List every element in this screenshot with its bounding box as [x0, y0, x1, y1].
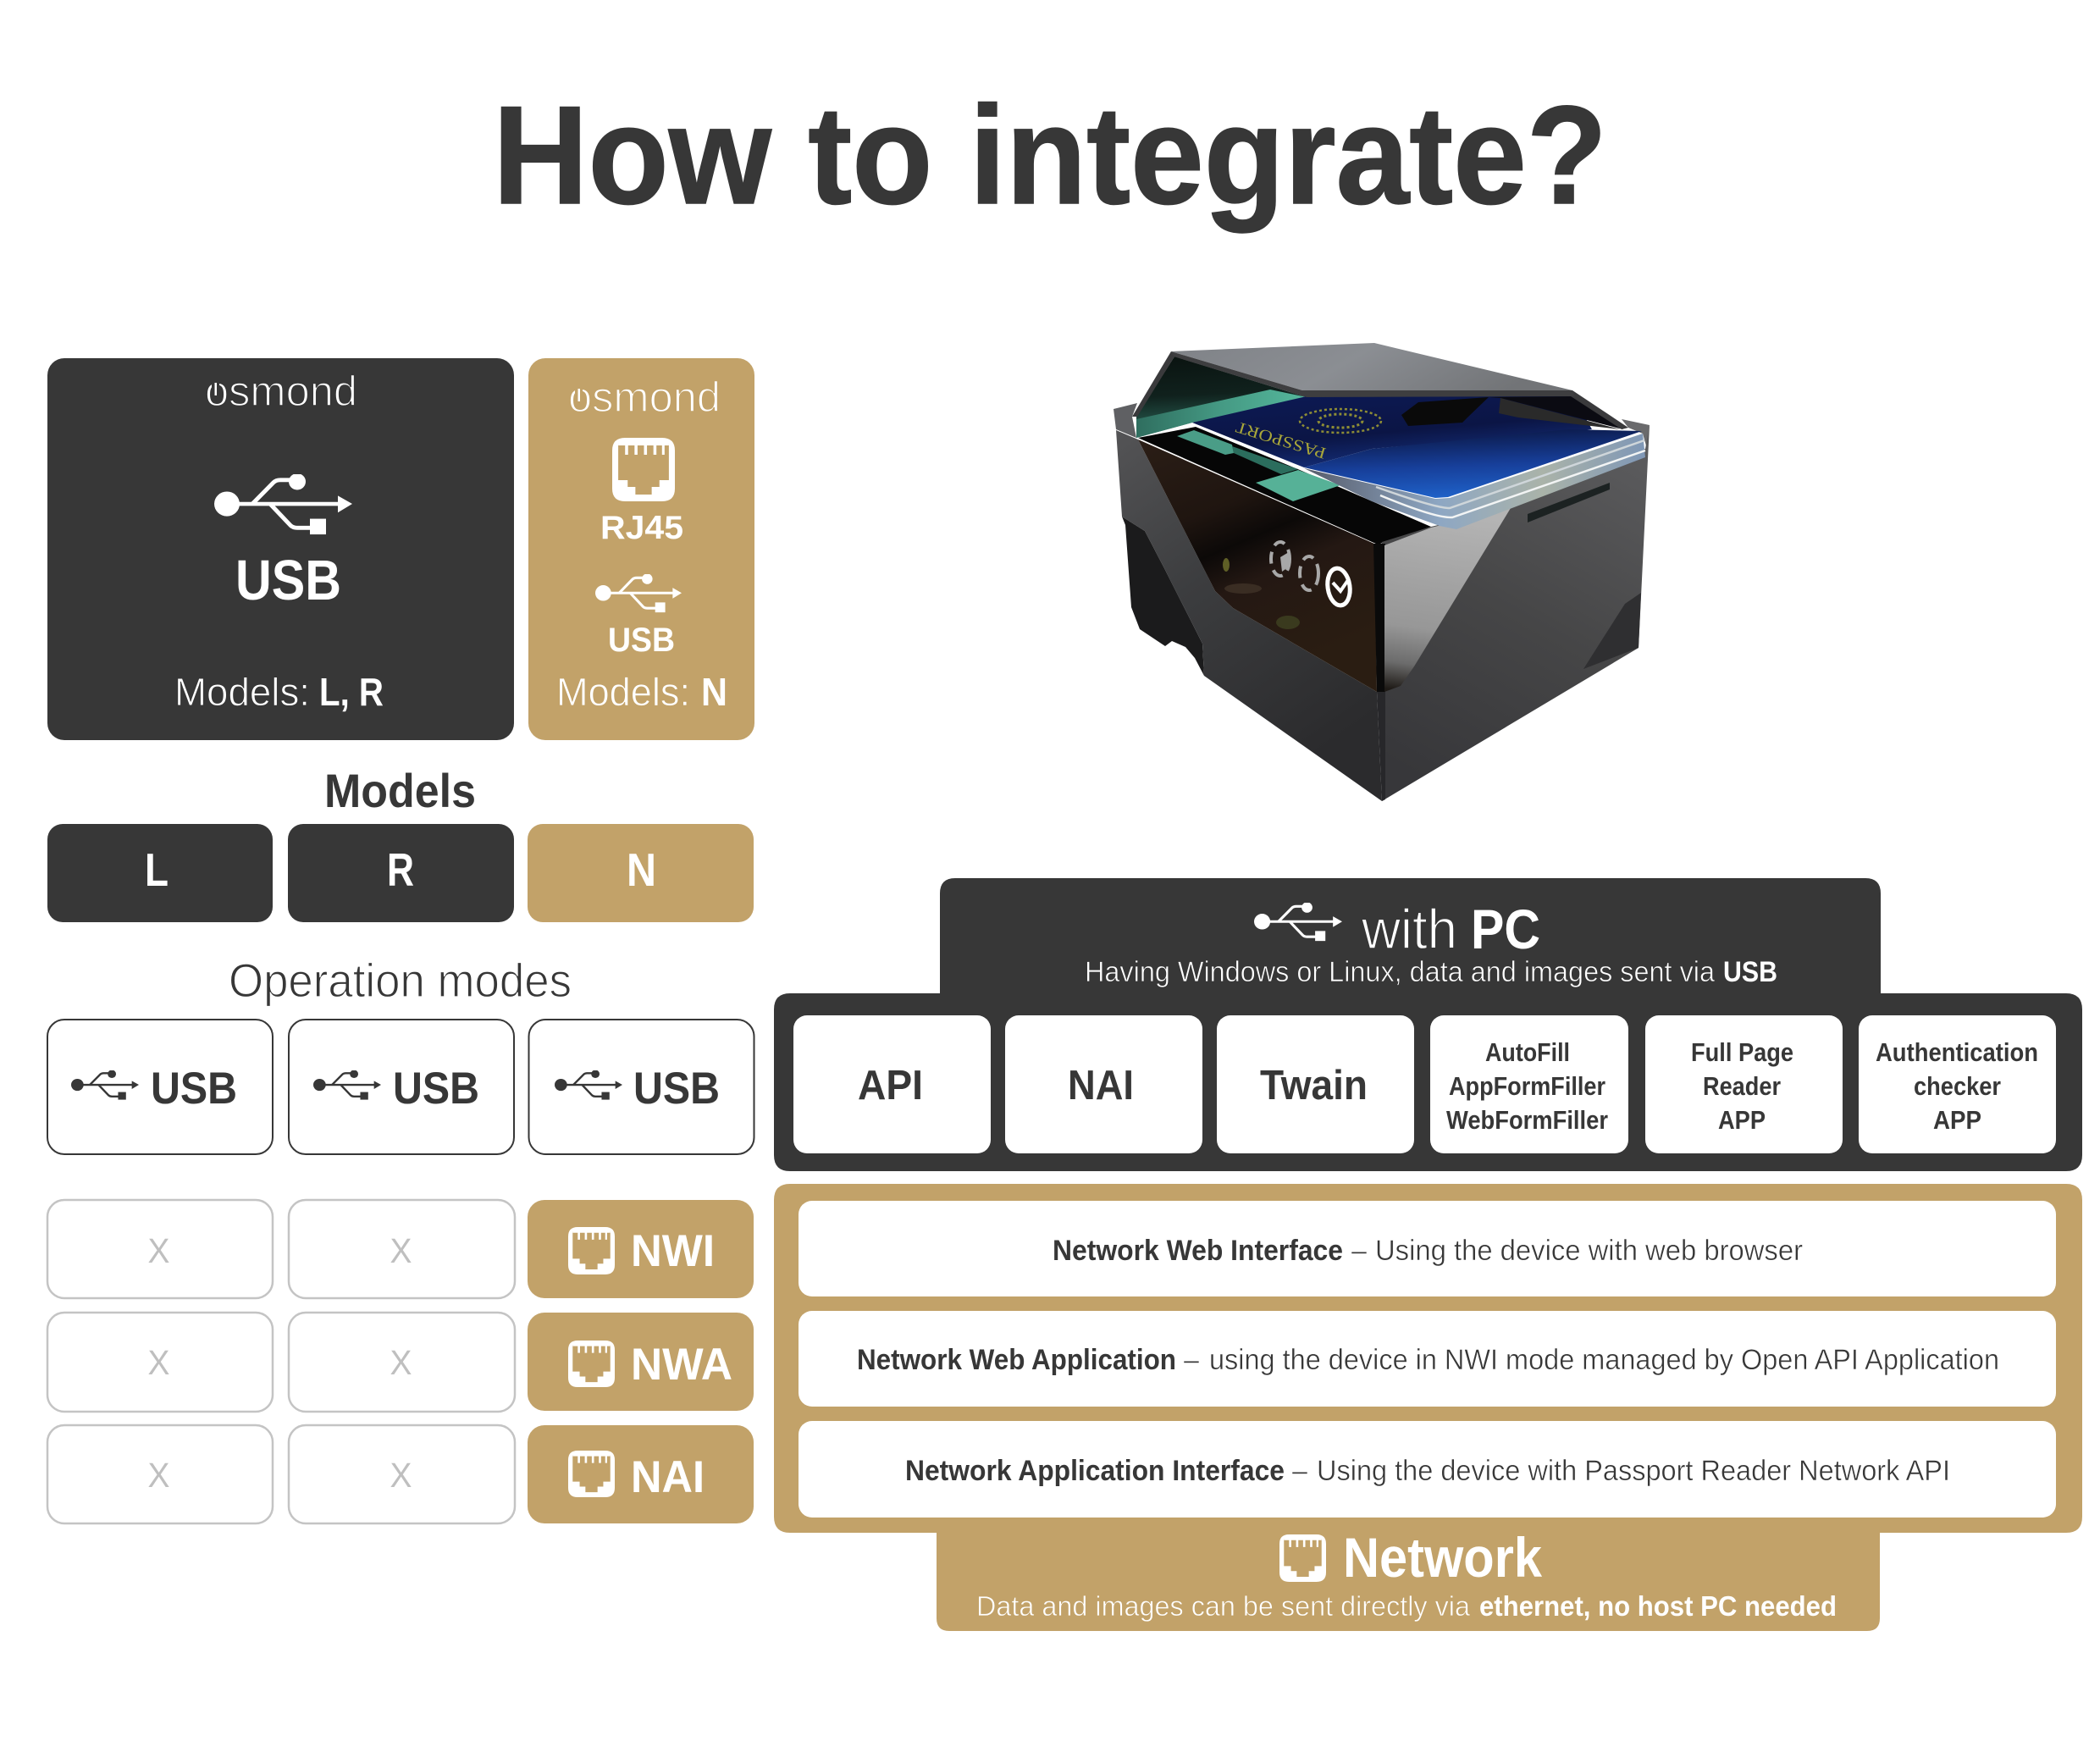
- row: Network Application Interface: Using the device with Passport Reader Network API: [1317, 1455, 1950, 1487]
- lid front edge: [1171, 351, 1575, 397]
- passport lettering: [1234, 409, 1381, 462]
- left face: [1116, 430, 1382, 801]
- panel: RJ45 and USB connectivity, model N: [528, 358, 754, 740]
- unavailable modes: models L and R: X: [390, 1343, 412, 1382]
- logo: osmond: osmond: [205, 368, 357, 415]
- card: Full Page Reader APP: Full Page: [1691, 1037, 1793, 1067]
- heading: with PC: PC: [1471, 898, 1540, 960]
- icon: USB: [595, 573, 682, 612]
- row: Network Web Interface: –: [1351, 1235, 1367, 1267]
- subtitle: USB: [1723, 956, 1777, 988]
- button: model R: R: [387, 843, 414, 896]
- row: Network Web Application: –: [1184, 1344, 1199, 1376]
- text: models L, R: L, R: [319, 670, 384, 714]
- label: USB: USB: [235, 549, 341, 612]
- logo: osmond: osmond: [568, 373, 721, 421]
- text: models N: Models:: [556, 670, 690, 714]
- row: Network Application Interface: Network Application Interface: [905, 1455, 1285, 1487]
- card: AutoFill, AppFormFiller, WebFormFiller: [1430, 1015, 1628, 1153]
- mode: USB for model N: [528, 1020, 754, 1154]
- panel: USB connectivity, models L and R: [47, 358, 514, 740]
- corner strip: [1373, 544, 1385, 692]
- row: Network Web Application: [799, 1311, 2056, 1407]
- top glass: [1138, 427, 1431, 545]
- lid right shadow: [1489, 396, 1623, 429]
- heading: Models: Models: [324, 764, 476, 817]
- glossy right facet: [1384, 508, 1511, 692]
- panel icons: [1271, 542, 1352, 607]
- lid underside left: [1136, 357, 1307, 438]
- device illustration: passport reader: [1114, 343, 1650, 801]
- card: API: [793, 1015, 991, 1153]
- heading: Network: Network: [1343, 1526, 1542, 1589]
- title: How to integrate?: [493, 77, 1607, 233]
- row: Network Web Application: using the device in NWI mode managed by Open API Application: [1209, 1344, 1999, 1376]
- panel highlights: [1223, 558, 1300, 629]
- icon: RJ45: [612, 438, 675, 501]
- lower corner strip: [1377, 692, 1385, 801]
- button: model R: [288, 824, 514, 922]
- icon: USB: [214, 473, 352, 534]
- unavailable modes: models L and R: X: [147, 1456, 169, 1495]
- subtitle: [976, 1590, 1837, 1622]
- row: Network Application Interface: [799, 1421, 2056, 1518]
- teal band: [1136, 390, 1307, 438]
- text: models L, R: [174, 670, 384, 714]
- subtitle: Having Windows or Linux, data and images sent via: [1085, 956, 1715, 988]
- passport cover, lower page: [1304, 429, 1642, 498]
- subtitle: Data and images can be sent directly via: [976, 1590, 1471, 1622]
- unavailable modes: models L and R: [47, 1200, 515, 1523]
- card: Authentication checker APP: [1859, 1015, 2056, 1153]
- card: Authentication checker APP: APP: [1933, 1105, 1981, 1135]
- button: model N: N: [627, 843, 656, 896]
- mode: USB for model L: USB: [151, 1064, 237, 1114]
- mode: USB for model R: USB: [393, 1064, 479, 1114]
- mode: USB for model N: USB: [633, 1064, 720, 1114]
- unavailable modes: models L and R: X: [147, 1343, 169, 1382]
- card: Authentication checker APP: Authentication: [1876, 1037, 2038, 1067]
- card: API: API: [858, 1063, 923, 1108]
- lid right strip: [1571, 390, 1628, 429]
- mode: NAI: [528, 1425, 754, 1523]
- text: models L, R: Models:: [174, 670, 310, 714]
- card: Twain: Twain: [1260, 1063, 1368, 1108]
- mode: USB for model L: [47, 1020, 273, 1154]
- lid: [1171, 343, 1572, 390]
- unavailable modes: models L and R: X: [390, 1231, 412, 1270]
- label: USB: USB: [608, 622, 675, 659]
- icon: USB: [1254, 902, 1342, 941]
- text: models N: N: [701, 670, 727, 714]
- button: model L: L: [145, 843, 169, 896]
- card: Full Page Reader APP: [1645, 1015, 1843, 1153]
- label: RJ45: RJ45: [600, 510, 683, 546]
- card: Twain: [1217, 1015, 1414, 1153]
- card: NAI: NAI: [1068, 1063, 1134, 1108]
- unavailable modes: models L and R: X: [147, 1231, 169, 1270]
- mode: NWA: NWA: [631, 1340, 732, 1390]
- mode: NWI: [528, 1200, 754, 1298]
- heading: with PC: with: [1361, 898, 1457, 960]
- subtitle: ethernet, no host PC needed: [1479, 1590, 1837, 1622]
- base back left: [1122, 517, 1204, 676]
- passport lettering: PASSPORT: [1234, 417, 1328, 462]
- button: model N: [528, 824, 754, 922]
- icon: RJ45: [1279, 1534, 1326, 1582]
- row: Network Web Interface: Using the device with web browser: [1375, 1235, 1803, 1267]
- right face: [1382, 425, 1650, 801]
- glossy front panel: [1138, 440, 1377, 692]
- passport pages: [1304, 434, 1645, 529]
- right ledge: [1622, 419, 1650, 449]
- card: Full Page Reader APP: APP: [1718, 1105, 1766, 1135]
- card: AutoFill, AppFormFiller, WebFormFiller: AutoFill: [1485, 1037, 1570, 1067]
- back ledge: [1114, 403, 1137, 438]
- card: AutoFill, AppFormFiller, WebFormFiller: WebFormFiller: [1446, 1105, 1608, 1135]
- mode: USB for model R: [289, 1020, 514, 1154]
- mode: NWI: NWI: [631, 1226, 715, 1276]
- mode: NWA: [528, 1313, 754, 1411]
- lid left edge: [1132, 351, 1174, 417]
- row: Network Web Interface: [799, 1201, 2056, 1296]
- heading: Operation modes: Operation modes: [229, 954, 572, 1007]
- card: Full Page Reader APP: Reader: [1703, 1071, 1781, 1101]
- heading: with PC: [1361, 898, 1540, 960]
- row: Network Web Application: Network Web Application: [857, 1344, 1176, 1376]
- scanner slot: [1528, 483, 1610, 522]
- clamp: [1401, 397, 1489, 426]
- teal windows: [1177, 430, 1340, 501]
- panel: Network: [774, 1184, 2082, 1631]
- button: model L: [47, 824, 273, 922]
- passport cover, upper page: [1192, 396, 1592, 467]
- unavailable modes: models L and R: X: [390, 1456, 412, 1495]
- panel: with PC: [774, 878, 2082, 1171]
- row: Network Web Interface: Network Web Interface: [1053, 1235, 1343, 1267]
- lid right wedge: [1499, 398, 1620, 429]
- right corner facet: [1583, 593, 1641, 669]
- card: Authentication checker APP: checker: [1914, 1071, 2001, 1101]
- mode: NAI: NAI: [631, 1452, 705, 1502]
- card: NAI: [1005, 1015, 1202, 1153]
- card: AutoFill, AppFormFiller, WebFormFiller: AppFormFiller: [1449, 1071, 1605, 1101]
- row: Network Application Interface: –: [1292, 1455, 1307, 1487]
